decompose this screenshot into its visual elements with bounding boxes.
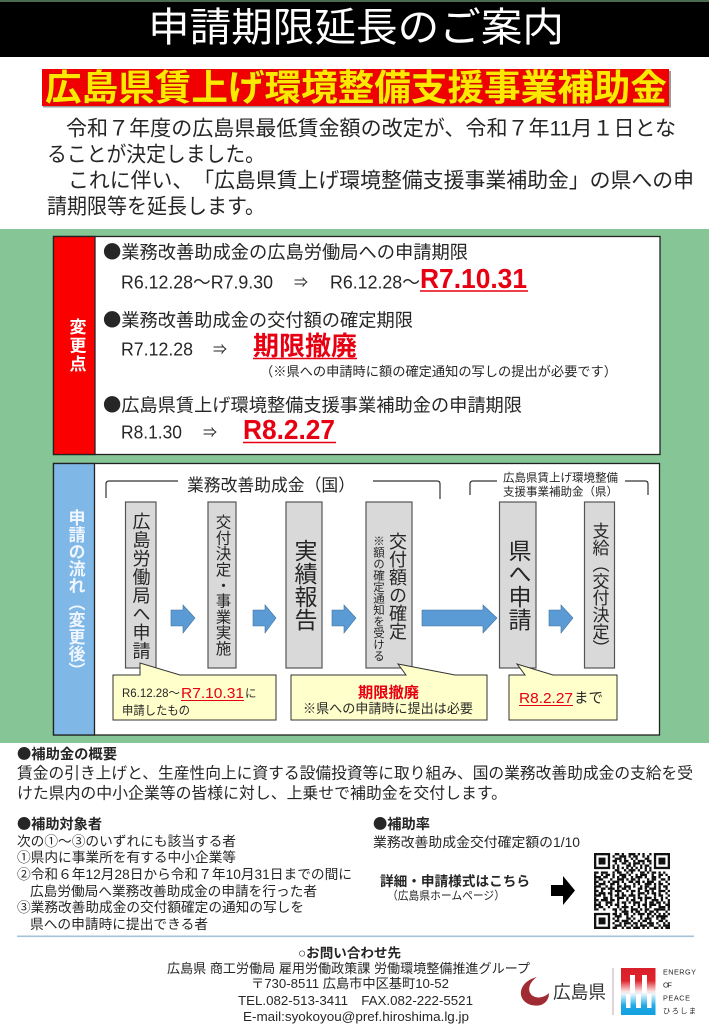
label: application flow: 申請の流れ（変更後） [66,508,85,679]
bracket: prefectural subsidy: 支援事業補助金（県） [503,484,618,498]
label: changes [54,236,95,454]
logo: Energy of Peace: ENERGY [663,968,696,976]
step 3 [286,502,322,668]
arrow 1 [171,605,195,633]
change 1: labour bureau deadline: R6.12.28～ [330,272,420,292]
section: eligibility: 県への申請時に提出できる者 [30,917,208,932]
change 3: prefecture deadline: ●広島県賃上げ環境整備支援事業補助金の申請期限 [103,392,522,418]
change 1: labour bureau deadline [103,238,528,294]
section: eligibility [17,813,352,932]
divider line [17,936,694,937]
callout: first step deadline [113,663,276,720]
arrow 2 [253,605,276,633]
change 2: grant amount deadline: R7.12.28 [121,340,193,360]
step 2 [208,502,236,668]
change 2: grant amount deadline: ⇒ [213,342,227,358]
change 2: grant amount deadline [103,306,617,379]
icon: black arrow to QR [551,876,575,905]
change 2: grant amount deadline: （※県への申請時に額の確定通知の写しの提出が必要です） [260,363,617,379]
step 3: 実績報告 [291,539,318,631]
callout: prefecture deadline: R8.2.27 [519,690,573,707]
intro paragraph [47,118,694,218]
contact information: TEL.082-513-3411 FAX.082-222-5521 [238,993,473,1008]
section: subsidy rate: ●補助率 [373,813,430,834]
section: subsidy rate: 業務改善助成金交付確定額の1/10 [373,834,580,850]
step 6: 支給（交付決定） [590,522,609,656]
title banner [0,2,709,57]
change 3: prefecture deadline: R8.2.27 [243,414,335,445]
panel: changes [54,236,660,454]
change 3: prefecture deadline [103,392,522,445]
bracket: prefectural subsidy: 広島県賃上げ環境整備 [503,470,618,484]
bracket: national subsidy [106,476,440,499]
callout: first step deadline: に [245,688,256,700]
logo: Hiroshima Prefecture [521,977,606,1006]
logo: Energy of Peace [621,968,696,1016]
title: 申請期限延長のご案内 [148,6,564,50]
section: eligibility: ③業務改善助成金の交付額確定の通知の写しを [17,899,304,915]
arrow 4 [422,605,497,633]
link text: details: 詳細・申請様式はこちら [380,873,530,889]
step 2: 交付決定・事業実施 [214,514,231,657]
contact information: 広島県 商工労働局 雇用労働政策課 労働環境整備推進グループ [167,960,530,976]
section: overview: けた県内の中小企業等の皆様に対し、上乗せで補助金を交付します。 [17,784,507,802]
logo: Energy of Peace: ひろしま [663,1006,696,1016]
step 1: 広島労働局へ申請 [130,512,150,660]
intro paragraph: これに伴い、「広島県賃上げ環境整備支援事業補助金」の県への申 [68,170,694,192]
change 1: labour bureau deadline: R7.10.31 [420,263,527,294]
green background band [0,229,709,743]
section: overview: 賃金の引き上げと、生産性向上に資する設備投資等に取り組み、国の業務改善助成金の支給を受 [17,764,693,782]
intro paragraph: ることが決定しました。 [47,144,265,166]
change 3: prefecture deadline: ⇒ [203,424,217,440]
subsidy name heading: 広島県賃上げ環境整備支援事業補助金 [45,67,667,108]
section: eligibility: 広島労働局へ業務改善助成金の申請を行った者 [30,883,317,899]
bracket: prefectural subsidy [470,470,648,498]
callout: deadline removed [291,664,487,720]
link text: details: （広島県ホームページ） [387,888,505,902]
section: eligibility: ●補助対象者 [17,813,102,834]
contact information: ○お問い合わせ先 [298,944,401,960]
section: subsidy rate [373,813,580,850]
callout: prefecture deadline: まで [574,691,603,707]
contact information [167,944,530,1024]
link text: details [380,873,530,902]
vertical logo divider [612,968,614,1015]
step 5 [500,502,536,668]
bracket: national subsidy: 業務改善助成金（国） [187,476,355,495]
arrow 3 [332,605,356,633]
arrow 5 [549,605,573,633]
step 1 [126,502,156,668]
logo: Energy of Peace: PEACE [663,994,690,1002]
step 4: 交付額の確定 [387,532,407,640]
section: overview [17,743,693,802]
change 1: labour bureau deadline: ●業務改善助成金の広島労働局への申請期限 [103,238,468,264]
logo: Hiroshima Prefecture: 広島県 [553,982,606,1002]
section: eligibility: 次の①～③のいずれにも該当する者 [17,834,236,849]
section: eligibility: ②令和６年12月28日から令和７年10月31日までの間に [17,867,352,882]
step 6 [584,502,614,668]
step 4 [366,502,412,668]
callout: deadline removed: 期限撤廃 [358,684,419,702]
contact information: E-mail:syokoyou@pref.hiroshima.lg.jp [243,1009,469,1024]
label: changes: 変更点 [66,318,86,374]
label: application flow [54,464,94,735]
QR code [594,853,670,929]
callout: first step deadline: R6.12.28～ [122,686,180,700]
change 3: prefecture deadline: R8.1.30 [121,422,182,442]
section: eligibility: ①県内に事業所を有する中小企業等 [17,849,236,865]
panel: application flow [54,464,660,735]
contact information: 〒730-8511 広島市中区基町10-52 [251,976,449,991]
callout: first step deadline: R7.10.31 [181,685,244,702]
change 2: grant amount deadline: 期限撤廃 [253,331,357,361]
callout: first step deadline: 申請したもの [122,704,190,718]
change 1: labour bureau deadline: R6.12.28～R7.9.30 [121,272,273,292]
intro paragraph: 令和７年度の広島県最低賃金額の改定が、令和７年11月１日とな [66,118,676,140]
step 4: ※額の確定通知を受ける [372,535,385,662]
change 2: grant amount deadline: ●業務改善助成金の交付額の確定期限 [103,306,413,332]
step 5: 県へ申請 [505,539,532,631]
callout: deadline removed: ※県への申請時に提出は必要 [303,701,473,716]
change 1: labour bureau deadline: ⇒ [294,274,308,290]
section: overview: ●補助金の概要 [17,743,117,764]
intro paragraph: 請期限等を延長します。 [47,196,265,218]
callout: prefecture deadline [509,664,617,720]
logo: Energy of Peace: OF [663,980,673,990]
